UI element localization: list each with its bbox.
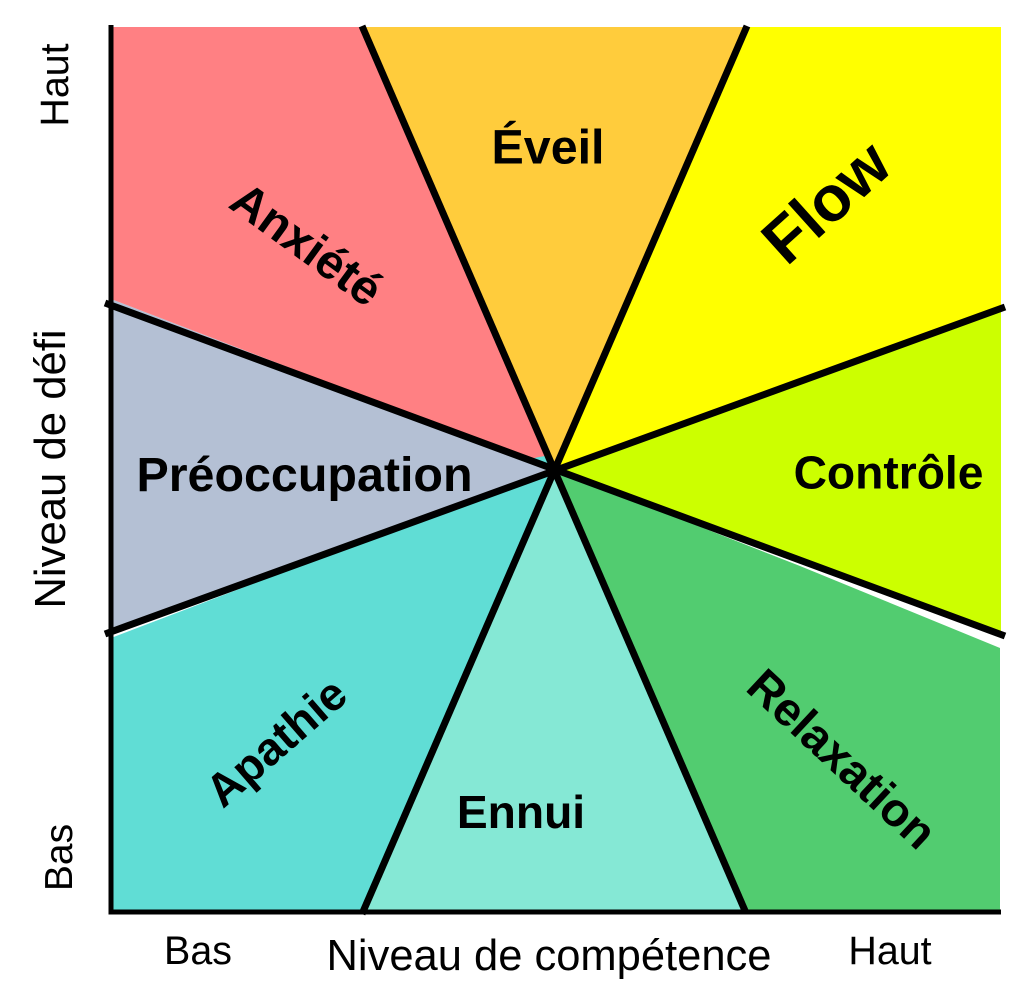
label: Ennui: Ennui	[457, 786, 585, 838]
y axis label: Haut: Haut	[33, 43, 77, 127]
panel: Éveil sector	[362, 27, 747, 469]
label: Apathie: Apathie	[195, 667, 357, 817]
panel: Contrôle sector	[553, 309, 1001, 634]
x axis title: Niveau de compétence: Niveau de compétence	[327, 932, 771, 980]
panel: Flow sector	[553, 27, 1001, 469]
teal sliver near centre	[534, 456, 552, 468]
label: Préoccupation: Préoccupation	[136, 448, 473, 502]
label: Éveil: Éveil	[492, 120, 604, 174]
panel: Apathie sector	[111, 469, 553, 912]
label: Contrôle: Contrôle	[794, 446, 983, 498]
y axis title: Niveau de défi: Niveau de défi	[26, 329, 75, 609]
panel: Relaxation sector	[553, 469, 1000, 912]
panel: Préoccupation sector	[111, 299, 553, 632]
x axis label: Haut: Haut	[848, 929, 932, 973]
label: Anxiété: Anxiété	[220, 173, 392, 317]
panel: Ennui sector	[362, 469, 746, 912]
y axis label: Bas: Bas	[38, 824, 81, 891]
label: Relaxation: Relaxation	[737, 658, 947, 859]
x axis label: Bas: Bas	[164, 929, 232, 973]
axes	[111, 25, 1001, 912]
sector dividing lines	[105, 26, 1005, 914]
panel: Anxiété sector	[111, 27, 553, 469]
label: Flow: Flow	[748, 126, 904, 278]
